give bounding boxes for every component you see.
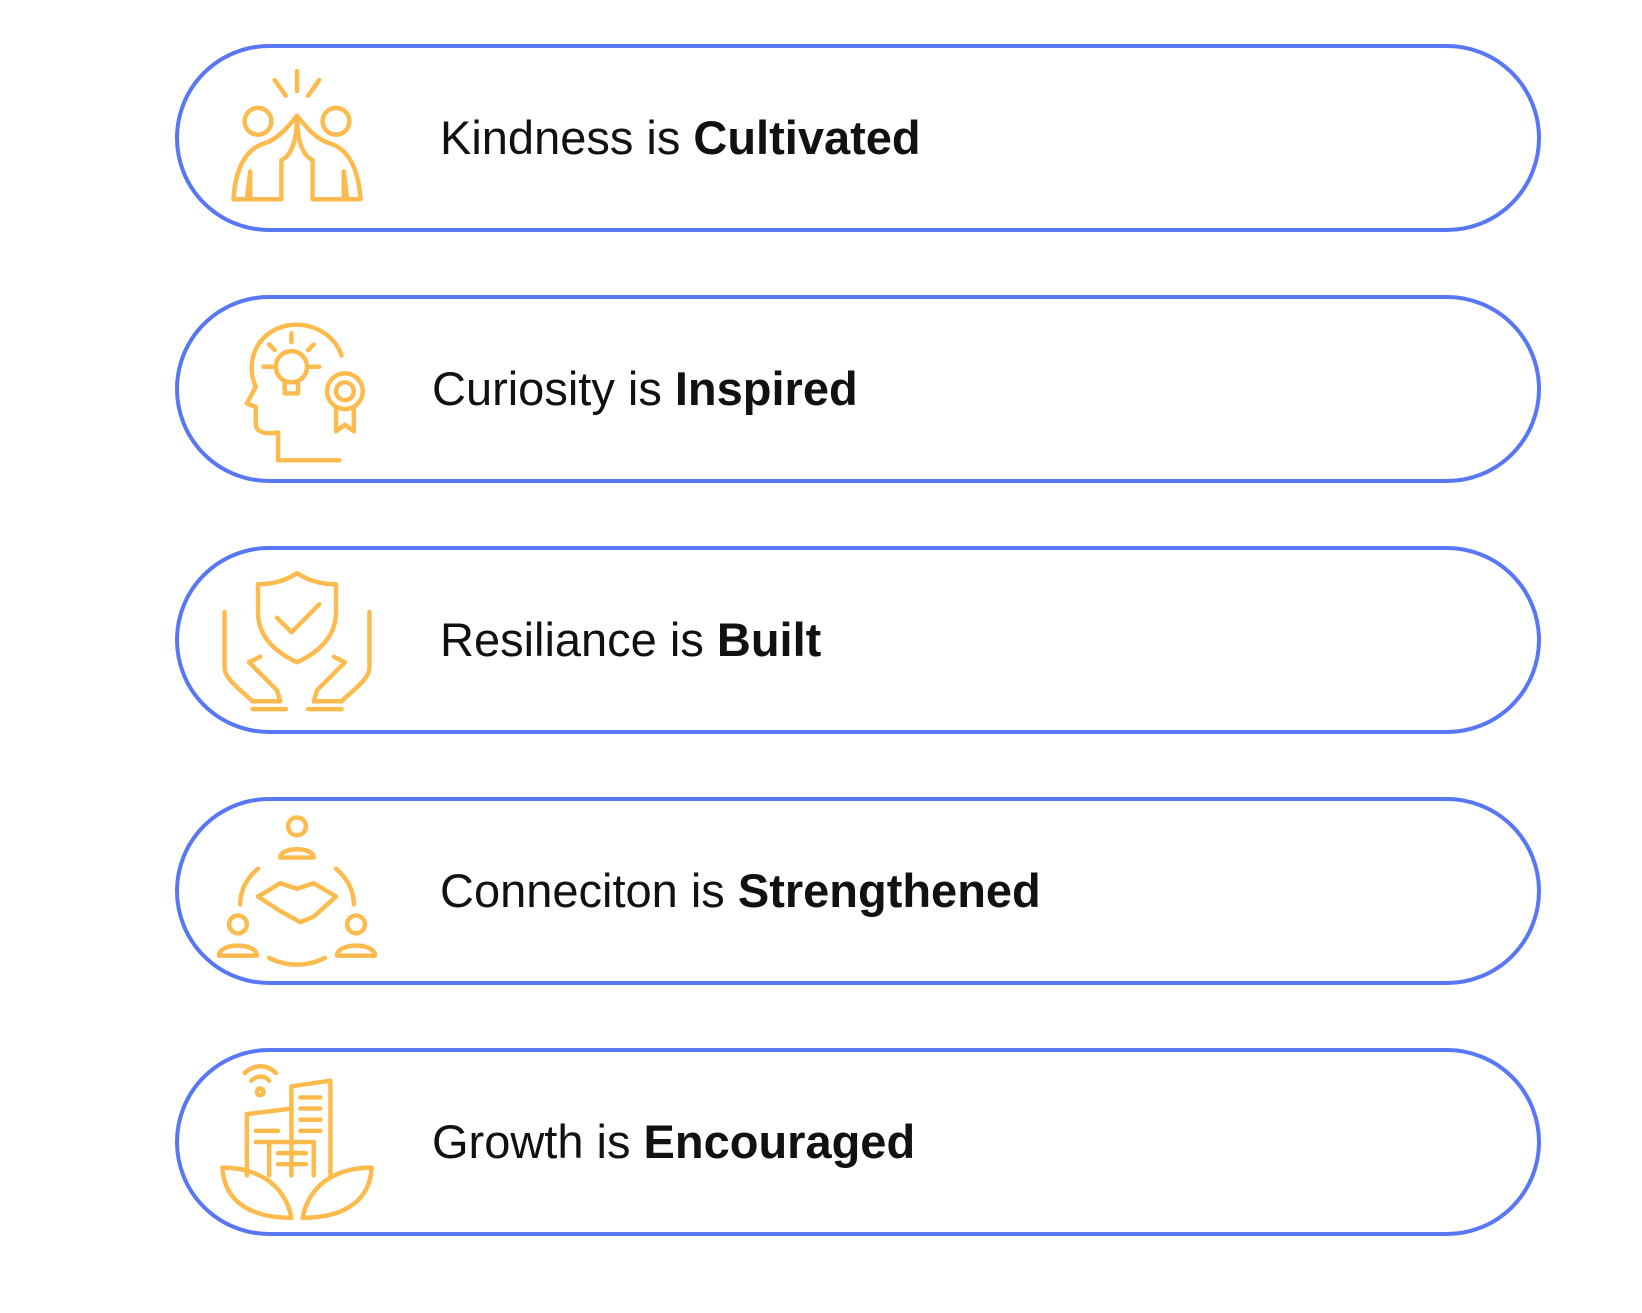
icon: high five — [231, 68, 363, 202]
text: Conneciton is Strengthened — [440, 864, 1041, 917]
icon: hands shield — [222, 570, 372, 712]
icon: head lightbulb — [244, 322, 365, 462]
panel: growth — [175, 1048, 1541, 1236]
text: Resiliance is Built — [440, 613, 821, 666]
text: Curiosity is Inspired — [432, 362, 858, 415]
text: Kindness is Cultivated — [440, 111, 921, 164]
panel: resilience — [175, 546, 1541, 734]
icon: handshake network — [216, 815, 378, 967]
panel: curiosity — [175, 295, 1541, 483]
text: Growth is Encouraged — [432, 1115, 915, 1168]
panel: connection — [175, 797, 1541, 985]
icon: city leaves — [220, 1064, 374, 1220]
panel: kindness — [175, 44, 1541, 232]
